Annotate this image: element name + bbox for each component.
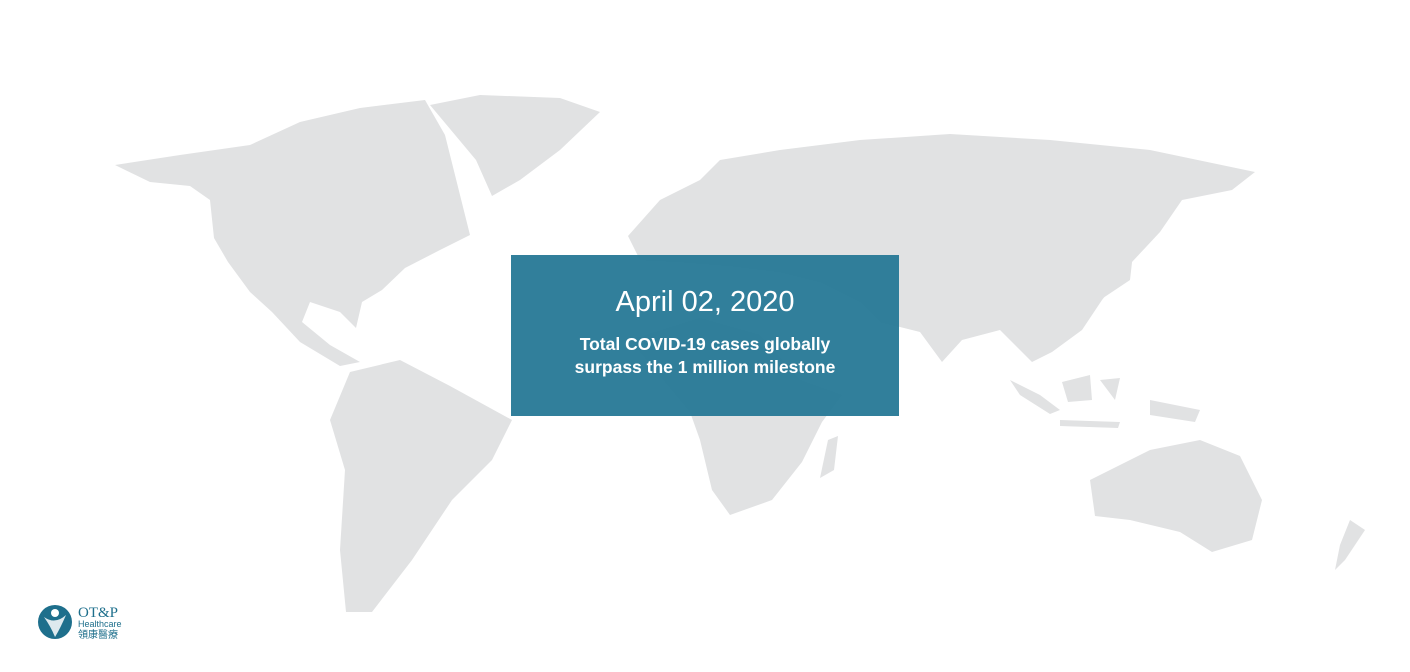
australia [1090, 440, 1262, 552]
madagascar [820, 436, 838, 478]
date heading: April 02, 2020 [616, 286, 794, 318]
logo: Healthcare [78, 619, 122, 629]
japan [1098, 236, 1135, 300]
north america [115, 100, 470, 366]
south america [330, 360, 512, 612]
new zealand [1335, 520, 1365, 570]
subtitle: Total COVID-19 cases globally [580, 334, 830, 354]
africa [630, 318, 842, 515]
greenland [430, 95, 600, 196]
logo: OT&P [78, 605, 118, 621]
subtitle [575, 334, 835, 377]
subtitle: surpass the 1 million milestone [575, 357, 835, 377]
logo [38, 605, 122, 641]
indonesia [1010, 375, 1200, 428]
logo: 領康醫療 [78, 626, 118, 641]
eurasia [628, 134, 1255, 362]
callout box [511, 255, 899, 416]
